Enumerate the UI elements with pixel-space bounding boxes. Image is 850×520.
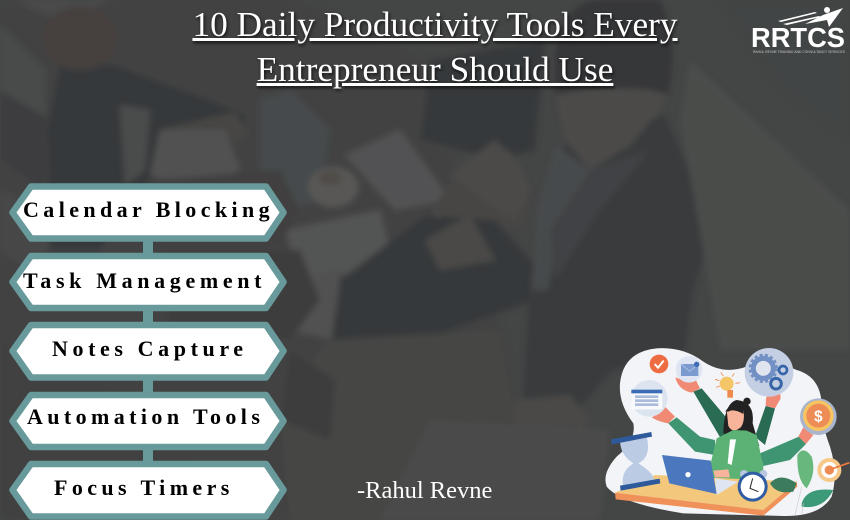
plants xyxy=(770,478,797,492)
gears xyxy=(745,348,793,397)
hexagon flow list xyxy=(9,183,287,520)
label: Calendar Blocking: Calendar Blocking xyxy=(23,197,274,222)
hands xyxy=(675,377,700,393)
label: Focus Timers: Focus Timers xyxy=(54,475,234,500)
title: 10 Daily Productivity Tools Every xyxy=(192,5,678,44)
woman xyxy=(711,398,763,482)
mail icon xyxy=(676,356,702,383)
target xyxy=(817,458,841,482)
check icon xyxy=(650,355,668,373)
desk xyxy=(615,475,797,510)
back arms xyxy=(693,388,732,440)
illustration: multitasking woman at desk xyxy=(605,348,850,516)
author credit: -Rahul Revne xyxy=(357,477,492,504)
light bulb xyxy=(720,377,734,391)
title: Entrepreneur Should Use xyxy=(257,50,613,89)
logo: RRTCS: RRTCS xyxy=(751,22,845,53)
label: Notes Capture: Notes Capture xyxy=(52,336,248,361)
calendar icon xyxy=(631,380,668,417)
hand on laptop xyxy=(713,469,730,477)
alarm clock xyxy=(740,470,748,478)
label: Automation Tools: Automation Tools xyxy=(27,404,264,429)
label: Task Management: Task Management xyxy=(23,268,266,293)
laptop xyxy=(662,455,717,494)
title xyxy=(192,5,680,92)
blob xyxy=(605,348,835,516)
hourglass xyxy=(620,437,655,487)
coin xyxy=(800,398,837,435)
logo: RRTCS xyxy=(751,7,845,54)
illustration: multitasking woman at desk: $ xyxy=(814,408,823,425)
